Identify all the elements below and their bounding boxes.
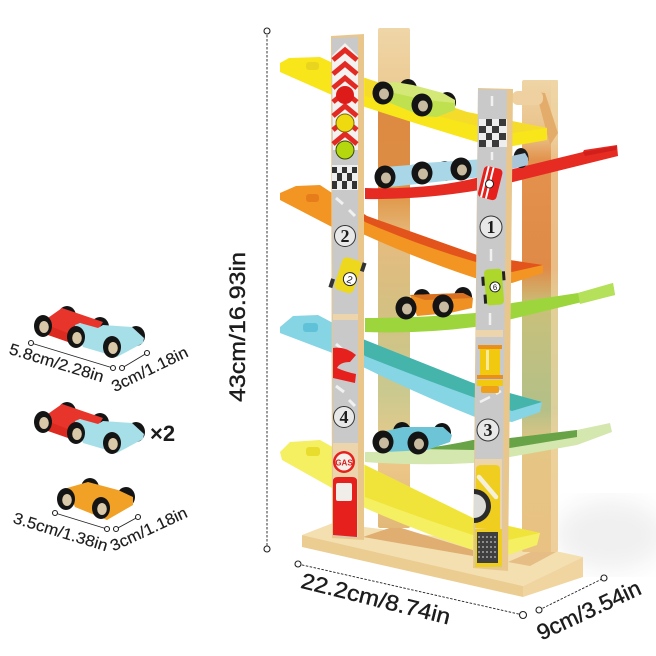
red car sticker	[333, 348, 356, 383]
car: orange on green ramp	[396, 287, 473, 320]
lime car sticker: 6	[492, 283, 498, 292]
yellow bus sticker	[477, 345, 503, 393]
orange width dimension	[114, 514, 140, 532]
checker	[479, 119, 507, 147]
number 1: 1	[486, 217, 496, 237]
height dimension line	[264, 28, 270, 552]
ramp: blue	[280, 315, 542, 422]
length dimension	[28, 340, 116, 370]
number 2: 2	[340, 226, 350, 246]
number 1	[480, 216, 502, 238]
sticker bands	[475, 330, 503, 567]
number 4: 4	[340, 407, 348, 427]
ramp: green	[365, 283, 615, 332]
left front post	[328, 34, 367, 540]
traffic lights	[336, 86, 354, 104]
car: blue on pale green ramp	[372, 422, 452, 454]
yellow car sticker: 2	[345, 274, 354, 287]
wooden base	[302, 523, 583, 597]
chevrons	[332, 43, 358, 150]
gas pump sticker	[333, 451, 357, 537]
lime car sticker	[481, 268, 507, 306]
width label: 3cm/1.18in	[109, 344, 191, 396]
checker	[332, 165, 358, 190]
small car: red and blue second	[34, 402, 145, 454]
right front post	[473, 88, 513, 571]
orange width label: 3cm/1.18in	[108, 505, 190, 555]
yellow car sticker	[328, 255, 367, 296]
number 3	[477, 419, 499, 441]
ramp: yellow top	[280, 57, 547, 146]
quantity label: ×2	[150, 421, 175, 446]
length label: 5.8cm/2.28in	[7, 341, 106, 386]
width label: 22.2cm/8.74in	[299, 568, 453, 629]
orange length label: 3.5cm/1.38in	[11, 510, 110, 555]
depth dimension line	[536, 575, 607, 613]
ramp: bottom yellow	[280, 440, 540, 555]
small car: red and blue with dimensions	[34, 306, 145, 358]
road marks	[336, 198, 355, 406]
back right post	[522, 80, 558, 552]
road marks	[480, 96, 501, 402]
sticker bands	[333, 314, 358, 537]
repair sticker	[474, 465, 502, 567]
ramp: orange	[280, 185, 543, 283]
number 3: 3	[484, 420, 492, 440]
car: blue pair on red ramp	[374, 148, 528, 188]
gas pump sticker: GAS	[335, 458, 353, 468]
height label: 43cm/16.93in	[225, 252, 250, 402]
width dimension	[120, 350, 150, 370]
depth label: 9cm/3.54in	[533, 575, 645, 645]
orange length dimension	[52, 510, 110, 532]
small car: orange	[57, 478, 135, 520]
number 2	[334, 226, 356, 246]
ramp: pale green	[365, 423, 612, 464]
background shadow	[555, 500, 656, 570]
back left post	[378, 28, 410, 528]
crossbar and brace	[512, 91, 558, 145]
ramp: red	[365, 145, 618, 199]
number 4	[334, 406, 354, 428]
width dimension line	[295, 561, 526, 618]
car: lime on yellow ramp	[372, 79, 456, 117]
red car sticker	[477, 165, 503, 201]
